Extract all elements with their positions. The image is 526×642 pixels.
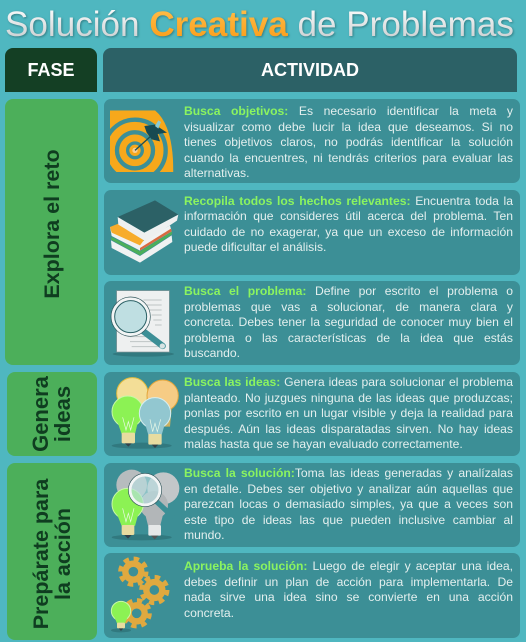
text: Busca la solución: Busca la solución:Toma las ideas generadas y analízalas (184, 466, 513, 480)
text: Busca el problema: buscando. (184, 346, 240, 360)
text: Busca el problema: problema o las características de la idea que estás (184, 330, 513, 344)
text: Busca objetivos: tienes objetivos claros, no podrás identificar la solución (184, 135, 513, 149)
text: Aprueba la solución (184, 559, 513, 620)
icon: target and dart (110, 110, 174, 172)
phase: Prepárate para la acción (7, 463, 97, 640)
header: FASE (5, 48, 97, 92)
text: Busca las ideas (184, 375, 513, 451)
text: Busca objetivos: cuando la encuentres, ni tendrás criterios para evaluar las (184, 150, 513, 164)
panel: Busca las ideas (104, 372, 520, 456)
text: Busca la solución: parezcan locas o demasiado simples, ya que a veces son (184, 497, 513, 511)
text: Busca el problema: problemas que vas a solucionar, de manera clara y (184, 300, 513, 314)
text: Aprueba la solución: debes definir un plan de acción para implementarla. De (184, 574, 513, 588)
text: Busca el problema (184, 284, 513, 360)
panel: Busca la solución (104, 463, 520, 547)
header: ACTIVIDAD: ACTIVIDAD (261, 60, 359, 80)
phase: Explora el reto: Explora el reto (40, 149, 64, 299)
text: Busca las ideas: después. Aún las ideas disparatadas sirven. No hay ideas (184, 422, 513, 436)
icon: bulbs with magnifier (112, 470, 180, 540)
panel: Busca objetivos (104, 99, 520, 183)
title: Solución Creativa de Problemas (5, 5, 514, 44)
text: Busca el problema: Busca el problema: Define por escrito el problema o (184, 284, 513, 298)
header: ACTIVIDAD (103, 48, 517, 92)
text: Busca el problema: concreta. Debes tener la seguridad de conocer muy bien el (184, 315, 513, 329)
text: Recopila hechos (184, 194, 513, 254)
phase: Genera ideas: Genera (28, 376, 53, 452)
text: Busca objetivos: visualizar como debe lucir la idea que deseamos. Si no (184, 120, 513, 134)
text: Recopila hechos: cuidado de no exagerar, ya que un exceso de información (184, 224, 513, 238)
text: Busca objetivos: Busca objetivos: Es necesario identificar la meta y (184, 104, 513, 118)
text: Busca las ideas: planteado. No juzgues ninguna de las ideas que produzcas; (184, 390, 513, 404)
text: Busca las ideas: malas hasta que se hayan evaluado correctamente. (184, 437, 463, 451)
text: Busca las ideas: ponlas por escrito en un lugar visible y deja la realidad para (184, 406, 513, 420)
text: Recopila hechos: Recopila todos los hechos relevantes: Encuentra toda la (184, 194, 513, 208)
phase: Genera ideas (7, 372, 97, 456)
text: Busca objetivos: alternativas. (184, 166, 249, 180)
text: Busca la solución (184, 466, 513, 542)
text: Recopila hechos: puede dificultar el análisis. (184, 240, 326, 254)
icon: light bulbs (112, 377, 179, 448)
phase: Prepárate para la acción: Prepárate para (29, 478, 53, 629)
text: Busca las ideas: Busca las ideas: Genera ideas para solucionar el problema (184, 375, 513, 389)
icon: document with magnifier (110, 290, 174, 356)
text: Recopila hechos: información que consideres útil acerca del problema. Ten (184, 209, 513, 223)
text: Aprueba la solución: Aprueba la solución: Luego de elegir y aceptar una idea, (184, 559, 513, 573)
phase: Prepárate para la acción: la acción (51, 508, 75, 600)
text: Busca la solución: en detalle. Debes ser objetivo y analizar aún aquellas que (184, 482, 513, 496)
text: Aprueba la solución: concreta. (184, 606, 234, 620)
panel: Aprueba la solución (104, 553, 520, 638)
icon: gears and bulb (110, 556, 170, 632)
text: Aprueba la solución: nada sirve una idea sino se convierte en una acción (184, 590, 513, 604)
icon: books (110, 200, 178, 263)
panel: Busca el problema (104, 281, 520, 365)
phase: Explora el reto (5, 99, 98, 365)
text: Busca la solución: este tipo de ideas las que pueden inclusive cambiar al (184, 512, 513, 526)
phase: Genera ideas: ideas (50, 386, 75, 442)
header: FASE: FASE (27, 60, 74, 80)
text: Busca la solución: mundo. (184, 528, 224, 542)
panel: Recopila hechos (104, 190, 520, 275)
text: Busca objetivos (184, 104, 513, 180)
